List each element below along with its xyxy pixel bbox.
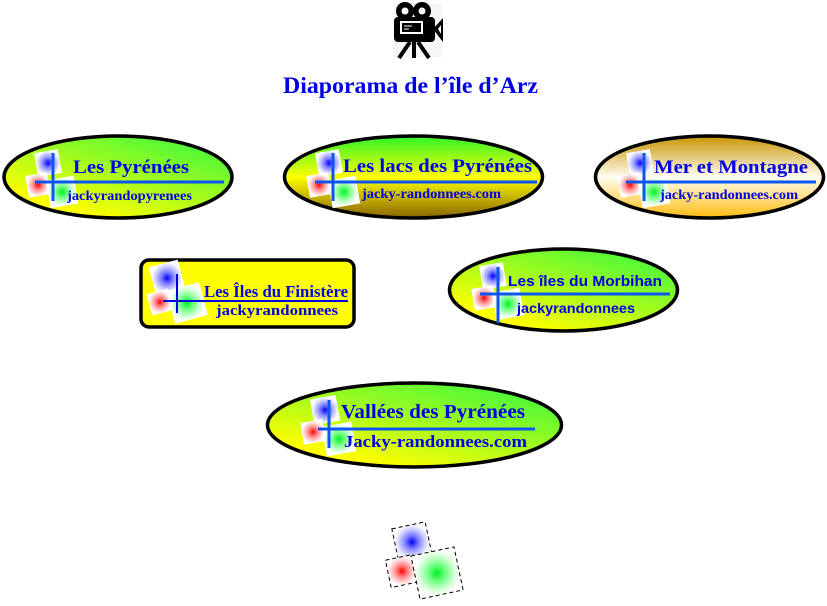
button: Les Îles du Finistère xyxy=(141,260,354,327)
button: Les îles du Morbihan xyxy=(450,249,678,331)
button: Les îles du Morbihan: jackyrandonnees xyxy=(516,300,635,316)
button: Mer et Montagne: Mer et Montagne xyxy=(654,157,808,178)
button: Les Pyrénées xyxy=(4,136,232,218)
button: Les Pyrénées: Les Pyrénées xyxy=(73,157,189,178)
button: Les lacs des Pyrénées: Les lacs des Pyrénées xyxy=(343,156,532,177)
logo: three coloured squares xyxy=(385,522,463,599)
button: Les Îles du Finistère: Les Îles du Finistère xyxy=(204,282,348,301)
button: Les Pyrénées: jackyrandopyrenees xyxy=(66,188,192,203)
button: Les îles du Morbihan: Les îles du Morbihan xyxy=(508,273,662,290)
button: Vallées des Pyrénées: Jacky-randonnees.com xyxy=(344,432,527,451)
button: Mer et Montagne xyxy=(596,136,824,218)
button: Les lacs des Pyrénées xyxy=(284,136,542,218)
button: Les Îles du Finistère: jackyrandonnees xyxy=(215,303,338,319)
title: Diaporama de l’île d’Arz xyxy=(283,73,538,98)
button: Vallées des Pyrénées xyxy=(268,383,562,467)
button: Les lacs des Pyrénées: jacky-randonnees.com xyxy=(361,186,502,201)
button: Vallées des Pyrénées: Vallées des Pyrénées xyxy=(341,402,525,423)
button: Mer et Montagne: jacky-randonnees.com xyxy=(659,187,799,202)
icon: film camera on tripod xyxy=(394,2,443,58)
